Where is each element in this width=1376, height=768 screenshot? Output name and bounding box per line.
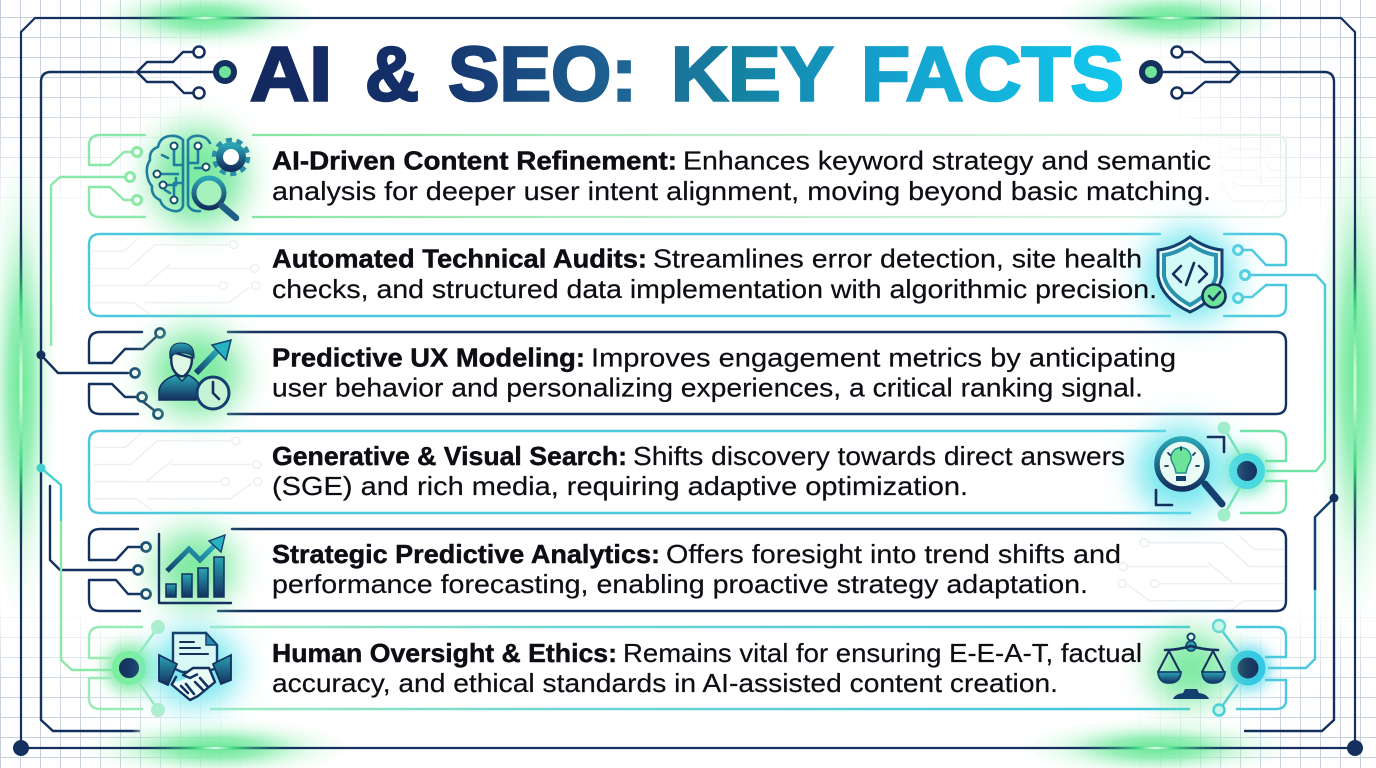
title circuit right: [1142, 46, 1240, 98]
panel: strategic predictive analytics: [36, 464, 1286, 670]
text: strategic predictive analytics: performance forecasting, enabling proactive strategy adaptation.: [272, 569, 1088, 599]
text: human oversight and ethics: accuracy, and ethical standards in AI-assisted content creation.: [272, 668, 1058, 698]
title: FACTS: [861, 32, 1124, 118]
panel: generative and visual search: [89, 422, 1286, 522]
text: generative and visual search: Shifts discovery towards direct answers: [633, 441, 1125, 471]
text: automated technical audits: Automated Technical Audits:: [272, 244, 647, 274]
icon: scales of justice: [1150, 632, 1230, 704]
connectors: panel 1 left: [51, 135, 145, 345]
title circuit left: [137, 46, 234, 98]
text: human oversight and ethics: Human Oversight & Ethics:: [272, 638, 617, 668]
panel: AI-driven content refinement: [51, 127, 1286, 345]
text: predictive UX modeling: Improves engagement metrics by anticipating: [591, 342, 1176, 372]
text: AI-driven content refinement: analysis for deeper user intent alignment, moving beyond basic matching.: [272, 176, 1211, 206]
text: predictive UX modeling: user behavior and personalizing experiences, a critical ranking signal.: [272, 372, 1143, 402]
text: automated technical audits: checks, and structured data implementation with algorithmic precision.: [272, 274, 1157, 304]
text: generative and visual search: Generative & Visual Search:: [272, 441, 627, 471]
text: strategic predictive analytics: Offers foresight into trend shifts and: [666, 539, 1121, 569]
text: human oversight and ethics: Remains vital for ensuring E-E-A-T, factual: [623, 638, 1142, 668]
icon: code shield: [1144, 229, 1236, 321]
text: strategic predictive analytics: Strategic Predictive Analytics:: [272, 539, 660, 569]
connectors: panel 2 right: [1224, 234, 1325, 471]
icon: bar chart with rising arrow: [155, 530, 235, 606]
text: automated technical audits: Streamlines error detection, site health: [653, 244, 1142, 274]
title: SEO:: [448, 32, 637, 118]
panel: automated technical audits: [89, 229, 1325, 471]
panel: human oversight and ethics: [89, 494, 1338, 717]
title: &: [365, 32, 419, 118]
text: predictive UX modeling: Predictive UX Modeling:: [272, 342, 585, 372]
connectors: panel 5 left: [36, 464, 150, 670]
icon: brain, gear and magnifier: [147, 127, 248, 227]
title: AI: [250, 32, 332, 118]
icon: magnifier with light bulb: [1136, 426, 1228, 514]
connectors: panel 4 right: [1218, 422, 1286, 522]
text: AI-driven content refinement: Enhances keyword strategy and semantic: [683, 146, 1211, 176]
text: generative and visual search: (SGE) and rich media, requiring adaptive optimization.: [272, 471, 968, 501]
connectors: panel 3 left: [36, 328, 164, 418]
connectors: panel 6 right: [1213, 494, 1338, 716]
icon: user, growth arrow and clock: [150, 329, 242, 417]
text: AI-driven content refinement: AI-Driven Content Refinement:: [272, 146, 677, 176]
connectors: panel 6 left: [89, 620, 165, 717]
title: KEY: [671, 32, 833, 118]
icon: document and handshake: [151, 630, 239, 706]
panel: predictive UX modeling: [36, 328, 1286, 418]
